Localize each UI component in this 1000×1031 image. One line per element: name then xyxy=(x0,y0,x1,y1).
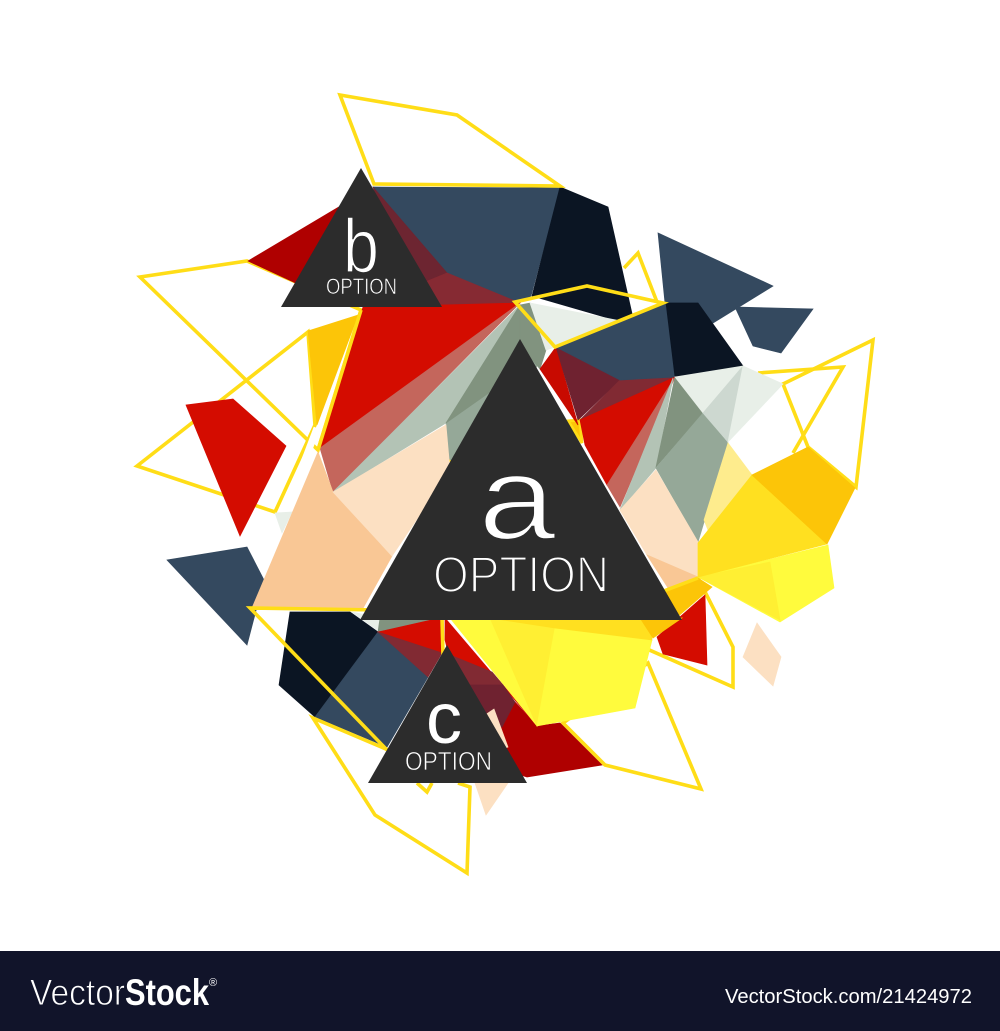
small triangle: option b: OPTION xyxy=(326,274,397,299)
small triangle: option c: OPTION xyxy=(405,746,492,776)
footer image id: VectorStock.com/21424972 xyxy=(725,986,972,1008)
small triangle: option b xyxy=(281,168,442,307)
detached shards xyxy=(167,233,813,815)
yellow wireframe outlines behind the shapes xyxy=(137,253,873,792)
footer logo: VectorStock xyxy=(30,972,226,1013)
small triangle: option b: b xyxy=(343,203,379,288)
main triangle: option a xyxy=(360,339,682,620)
footer logo: ® xyxy=(209,977,217,989)
cluster: upper left facets xyxy=(248,187,633,610)
small triangle: option c xyxy=(368,645,527,783)
yellow wireframe outlines over the shapes xyxy=(250,95,698,873)
footer bar xyxy=(0,951,1000,1031)
main triangle: option a: OPTION xyxy=(433,546,609,603)
small triangle: option c: c xyxy=(426,679,462,759)
cluster: right facets xyxy=(540,303,855,665)
cluster: lower facets xyxy=(279,612,682,777)
main triangle: option a: a xyxy=(478,431,557,565)
